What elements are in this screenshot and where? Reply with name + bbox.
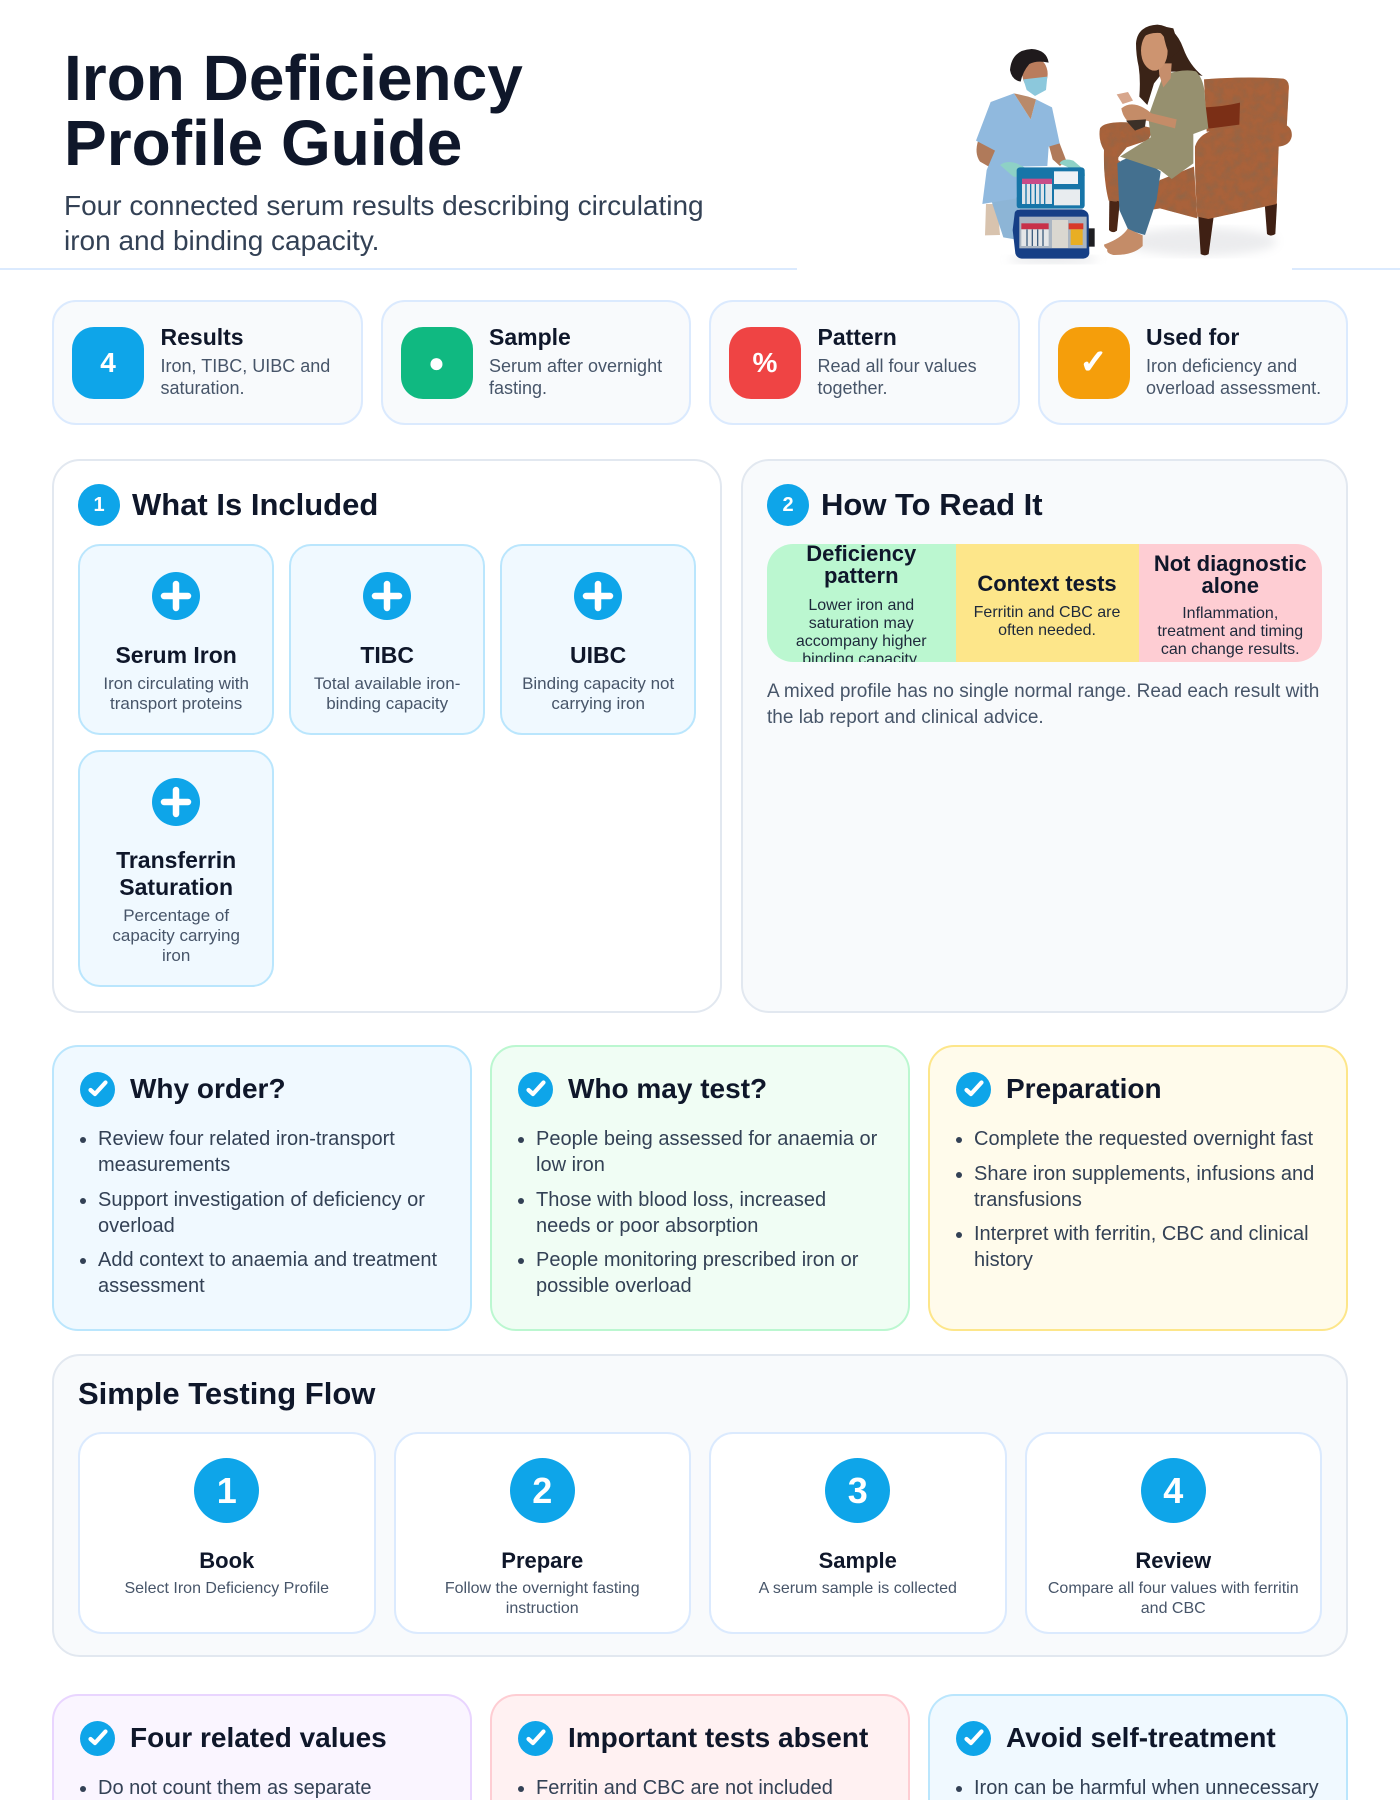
title: Profile Guide (64, 106, 462, 178)
section number 1: 1 (93, 494, 105, 516)
stat card: used for: Used for (1146, 324, 1239, 350)
list: Ferritin and CBC are not included (536, 1777, 833, 1799)
item: serum iron (78, 544, 274, 735)
stat card: pattern (709, 300, 1020, 425)
stat card: used for: ✓ (1080, 342, 1107, 381)
icon: check (956, 1072, 991, 1107)
segment: deficiency pattern: saturation may (809, 614, 914, 632)
segment: not diagnostic alone: can change results. (1161, 640, 1300, 658)
header divider line (0, 268, 1400, 270)
icon: check (80, 1072, 115, 1107)
step 1: book: Book (199, 1548, 254, 1573)
panel: what is included (52, 459, 722, 1013)
stat card: used for: Iron deficiency and (1146, 356, 1297, 376)
mask (1023, 77, 1047, 96)
list: history (974, 1249, 1033, 1271)
chair legs (1198, 217, 1214, 255)
step 3: sample: A serum sample is collected (759, 1580, 957, 1596)
stat card: pattern: Read all four values (818, 356, 977, 376)
list: Add context to anaemia and treatment (98, 1249, 437, 1271)
heading: How To Read It (821, 487, 1043, 522)
cushion (1205, 103, 1240, 129)
list (956, 1128, 1314, 1271)
segment: not diagnostic alone: Inflammation, (1182, 604, 1278, 622)
nurse head (1022, 58, 1048, 90)
stat card: pattern: together. (818, 378, 888, 398)
woman: hair behind (1136, 25, 1203, 105)
card: important tests absent: Important tests absent (568, 1722, 868, 1753)
gloves (1000, 162, 1033, 178)
card: why order (52, 1045, 472, 1331)
stat card: pattern: Pattern (818, 324, 897, 350)
phone and hands (1117, 92, 1133, 104)
stat card: sample: fasting. (489, 378, 547, 398)
card: preparation (928, 1045, 1348, 1331)
list: People being assessed for anaemia or (536, 1128, 877, 1150)
list: Iron can be harmful when unnecessary (974, 1777, 1319, 1799)
item: TIBC: Total available iron- (314, 674, 460, 693)
segment: deficiency pattern: pattern (824, 563, 899, 588)
item: TIBC (289, 544, 485, 735)
icon: check (518, 1072, 553, 1107)
item: TIBC: binding capacity (326, 694, 448, 713)
item: transferrin saturation: iron (162, 946, 190, 965)
nurse: legs and sock (985, 204, 1000, 235)
list: Review four related iron-transport (98, 1128, 395, 1150)
list: low iron (536, 1154, 605, 1176)
stat card: pattern: % (753, 347, 777, 378)
item: transferrin saturation: Saturation (119, 874, 233, 900)
item: transferrin saturation: Transferrin (116, 847, 236, 873)
list: transfusions (974, 1189, 1082, 1211)
stat card: results (52, 300, 362, 425)
section number 2 (767, 484, 809, 526)
segment: not diagnostic alone: treatment and timing (1157, 622, 1303, 640)
stat card: sample: ● (428, 347, 445, 378)
card: four related values: Four related values (130, 1722, 387, 1753)
segment: deficiency pattern (767, 544, 956, 662)
stat card: sample: Serum after overnight (489, 356, 662, 376)
item: UIBC: carrying iron (551, 694, 645, 713)
step 2: prepare: Prepare (501, 1548, 583, 1573)
segment: not diagnostic alone: alone (1202, 573, 1259, 598)
explanatory paragraph: the lab report and clinical advice. (767, 707, 1044, 728)
pattern bar (767, 544, 1322, 662)
stat card: results: Iron, TIBC, UIBC and (160, 356, 330, 376)
step 4: review: and CBC (1141, 1600, 1206, 1616)
list: Those with blood loss, increased (536, 1189, 826, 1211)
list (80, 1128, 437, 1297)
subtitle (64, 190, 704, 256)
step 3: sample: Sample (819, 1548, 897, 1573)
step 4: review (1024, 1432, 1322, 1634)
list: measurements (98, 1154, 230, 1176)
card: why order: Why order? (130, 1073, 286, 1104)
explanatory paragraph: A mixed profile has no single normal range. Read each result with (767, 681, 1319, 702)
item: serum iron: transport proteins (110, 694, 242, 713)
icon: check (956, 1721, 991, 1756)
list: needs or poor absorption (536, 1215, 758, 1237)
list: Complete the requested overnight fast (974, 1128, 1313, 1150)
section number 2: 2 (782, 494, 794, 516)
list: overload (98, 1215, 175, 1237)
segment: deficiency pattern: accompany higher (796, 632, 927, 650)
illustration: nurse with sample kit and woman in armchair (797, 24, 1292, 270)
segment: context tests: Ferritin and CBC are (974, 604, 1120, 621)
scrubs (976, 93, 1060, 204)
title (64, 42, 523, 178)
step 2: prepare: 2 (532, 1470, 552, 1511)
item: TIBC: TIBC (360, 642, 414, 668)
feet (1104, 229, 1143, 255)
step 3: sample (709, 1432, 1006, 1634)
segment: context tests: often needed. (998, 622, 1096, 639)
icon: check (80, 1721, 115, 1756)
card: who may test: Who may test? (568, 1073, 767, 1104)
heading: Simple Testing Flow (78, 1376, 375, 1411)
card: avoid self-treatment: Avoid self-treatment (1006, 1722, 1276, 1753)
step 4: review: Compare all four values with ferritin (1048, 1580, 1299, 1596)
armchair (1100, 77, 1292, 219)
card: four related values (52, 1694, 472, 1800)
stat card: sample (380, 300, 691, 425)
list: Interpret with ferritin, CBC and clinical (974, 1223, 1309, 1245)
list (518, 1128, 877, 1297)
item: UIBC (500, 544, 696, 735)
item: transferrin saturation: capacity carrying (112, 926, 240, 945)
icon: check (518, 1721, 553, 1756)
segment: context tests: Context tests (977, 571, 1117, 596)
heading: What Is Included (132, 487, 378, 522)
tunic (1120, 70, 1208, 179)
stat card: results: Results (160, 324, 244, 350)
segment: deficiency pattern: Lower iron and (808, 596, 914, 614)
segment: not diagnostic alone (1138, 544, 1322, 662)
segment: not diagnostic alone: Not diagnostic (1154, 551, 1307, 576)
card: who may test (490, 1045, 910, 1331)
list: People monitoring prescribed iron or (536, 1249, 858, 1271)
item: transferrin saturation (78, 750, 274, 986)
segment: context tests (956, 544, 1138, 662)
card: preparation: Preparation (1006, 1073, 1162, 1104)
panel: how to read it (741, 459, 1348, 1013)
list: Support investigation of deficiency or (98, 1189, 425, 1211)
floor shadow (1123, 228, 1277, 256)
jeans (1117, 157, 1161, 235)
step 1: book (78, 1432, 376, 1634)
step 2: prepare: Follow the overnight fasting (445, 1580, 640, 1596)
card: avoid self-treatment (928, 1694, 1348, 1800)
stat card: results: 4 (100, 347, 116, 378)
step 4: review: Review (1135, 1548, 1211, 1573)
item: UIBC: UIBC (570, 642, 626, 668)
item: serum iron: Iron circulating with (103, 674, 249, 693)
sample kit (1013, 167, 1095, 259)
list: assessment (98, 1275, 205, 1297)
list: Do not count them as separate (98, 1777, 372, 1799)
list: possible overload (536, 1275, 692, 1297)
explanatory paragraph (767, 681, 1319, 728)
stat card: used for (1038, 300, 1348, 425)
title: Iron Deficiency (64, 42, 523, 114)
step 2: prepare (394, 1432, 691, 1634)
step 1: book: Select Iron Deficiency Profile (124, 1580, 329, 1596)
item: transferrin saturation: Percentage of (123, 906, 229, 924)
item: UIBC: Binding capacity not (522, 674, 674, 693)
subtitle: Four connected serum results describing circulating (64, 190, 704, 221)
list: Share iron supplements, infusions and (974, 1163, 1314, 1185)
stat card: used for: overload assessment. (1146, 378, 1321, 398)
step 3: sample: 3 (848, 1470, 868, 1511)
item: serum iron: Serum Iron (115, 642, 237, 668)
step 4: review: 4 (1163, 1470, 1183, 1511)
neck and face (1158, 63, 1172, 87)
stat card: sample: Sample (489, 324, 571, 350)
nurse: arms (977, 140, 1003, 173)
step 2: prepare: instruction (506, 1600, 579, 1616)
stat card: results: saturation. (160, 378, 245, 398)
section number 1 (78, 484, 120, 526)
panel: simple testing flow (52, 1354, 1348, 1657)
card: important tests absent (490, 1694, 910, 1800)
subtitle: iron and binding capacity. (64, 225, 379, 256)
step 1: book: 1 (217, 1470, 237, 1511)
